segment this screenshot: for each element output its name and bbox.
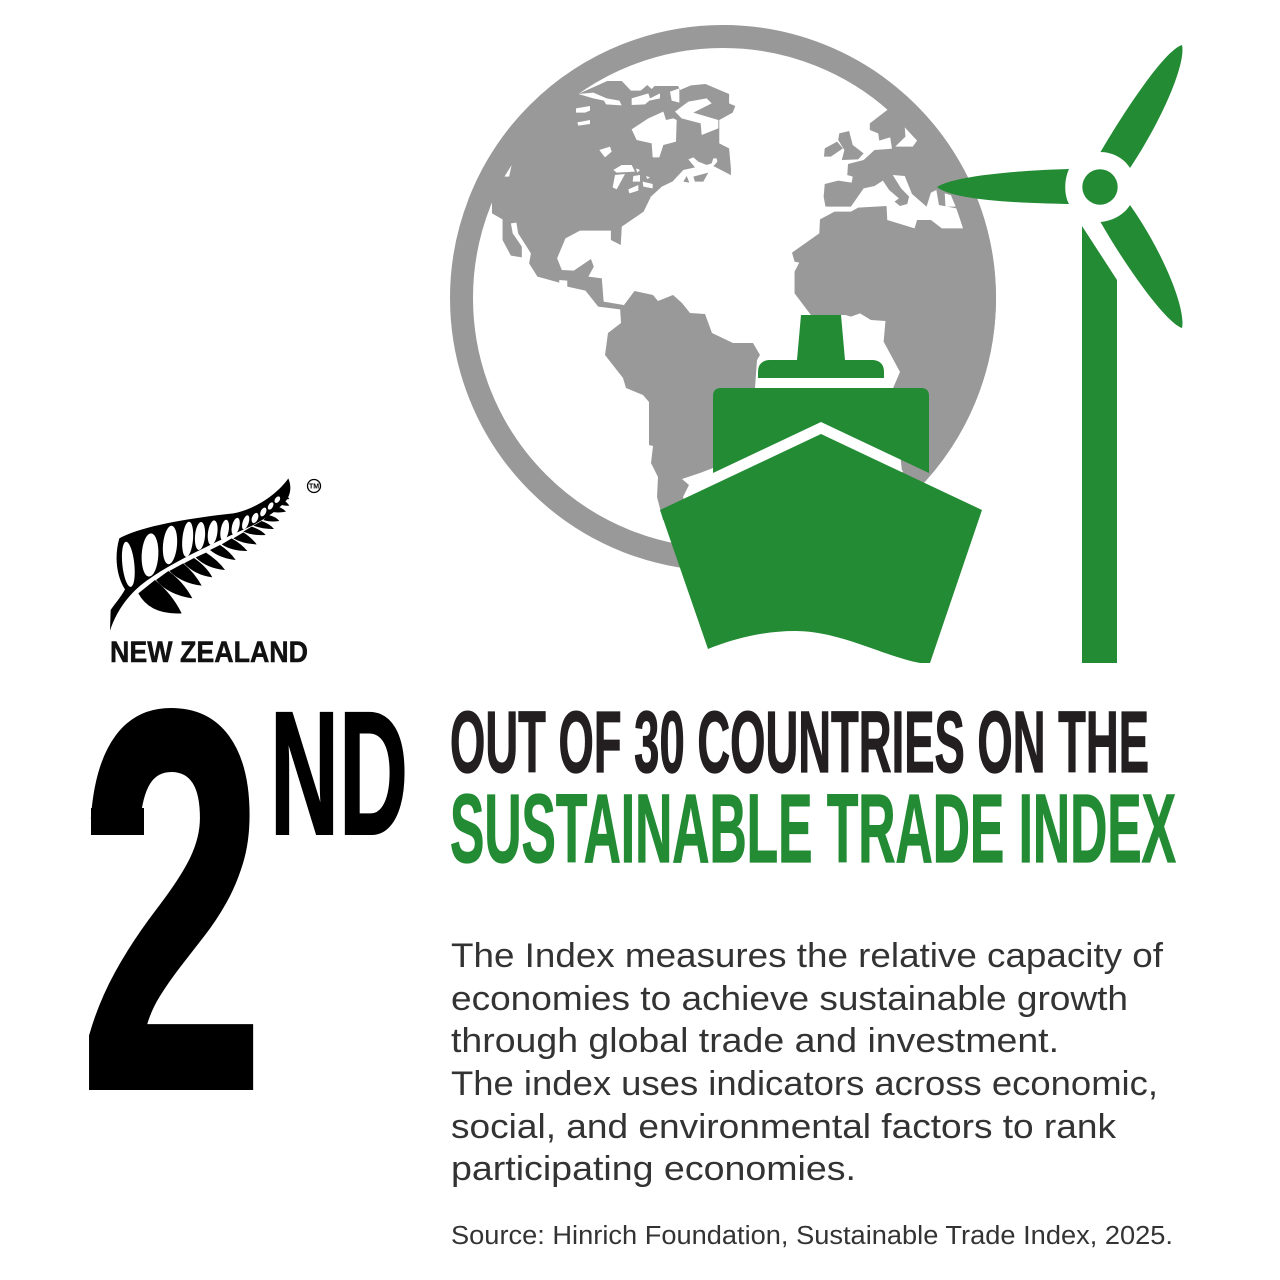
body paragraph bbox=[451, 937, 1164, 1188]
superscript ND: ND bbox=[270, 676, 408, 872]
ship superstructure bbox=[713, 388, 929, 473]
globe inland water, North America bbox=[576, 88, 735, 203]
icon: wind turbine bbox=[937, 45, 1182, 663]
large 2: 2 bbox=[79, 600, 265, 1202]
trademark symbol: TM bbox=[309, 484, 319, 490]
globe inland water, Europe bbox=[504, 127, 956, 207]
icon: cargo ship bbox=[660, 315, 982, 663]
globe ring bbox=[462, 36, 984, 560]
large 2 bbox=[79, 600, 265, 1202]
turbine blade lower bbox=[1100, 205, 1182, 328]
rank numeral: 2nd bbox=[79, 600, 408, 1202]
body paragraph: economies to achieve sustainable growth bbox=[451, 980, 1128, 1018]
fern mark bbox=[110, 478, 290, 631]
body paragraph: The Index measures the relative capacity of bbox=[451, 937, 1164, 975]
source note: Source: Hinrich Foundation, Sustainable Trade Index, 2025. bbox=[451, 1222, 1173, 1250]
turbine hub bbox=[1082, 169, 1118, 205]
globe Atlantic coast islands bbox=[683, 162, 731, 183]
ship funnel and bridge bbox=[758, 315, 884, 378]
logo: New Zealand fern bbox=[110, 478, 320, 669]
globe land masses bbox=[468, 76, 996, 520]
body paragraph: through global trade and investment. bbox=[451, 1022, 1059, 1060]
turbine tower bbox=[1082, 226, 1117, 663]
ship hull bbox=[660, 434, 982, 663]
heading bbox=[450, 694, 1176, 883]
turbine blade left bbox=[937, 169, 1069, 204]
icon: globe bbox=[440, 36, 1058, 560]
body paragraph: participating economies. bbox=[451, 1150, 856, 1188]
body paragraph: The index uses indicators across economic, bbox=[451, 1065, 1158, 1103]
body paragraph: social, and environmental factors to rank bbox=[451, 1108, 1117, 1146]
turbine blade upper bbox=[1100, 45, 1182, 168]
logo wordmark: NEW ZEALAND bbox=[110, 636, 308, 669]
trademark symbol bbox=[308, 480, 320, 492]
